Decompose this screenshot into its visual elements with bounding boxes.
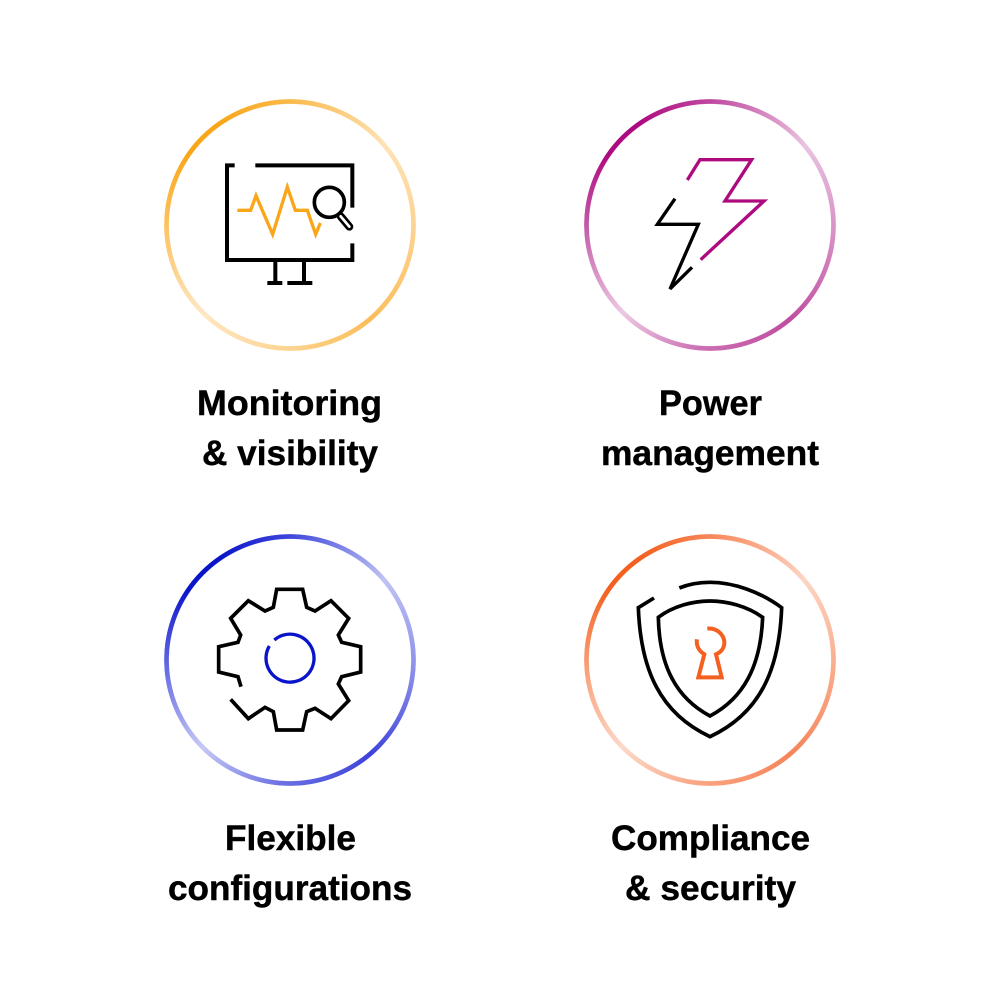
icon: gear <box>216 588 362 732</box>
heading <box>168 819 412 908</box>
outer shield <box>638 582 782 737</box>
icon: lightning bolt <box>654 158 768 290</box>
heading: Flexible <box>225 819 356 858</box>
ring: orange-red gradient circle <box>584 534 836 786</box>
ring: orange gradient circle <box>164 99 416 351</box>
ring: blue gradient circle <box>164 534 416 786</box>
heading: & visibility <box>202 434 379 473</box>
bolt upper part <box>687 160 764 260</box>
icon: monitor with chart and magnifier <box>225 163 354 285</box>
pulse line <box>237 187 320 234</box>
heading: Power <box>659 384 762 423</box>
ring: magenta gradient circle <box>584 99 836 351</box>
heading <box>197 384 382 473</box>
keyhole <box>697 629 724 677</box>
magnifier <box>314 187 349 227</box>
heading: management <box>601 434 819 473</box>
panel: power management <box>584 99 836 473</box>
heading: & security <box>625 869 797 908</box>
panel: compliance and security <box>584 534 836 908</box>
heading <box>611 819 810 908</box>
icon: shield with keyhole <box>636 580 784 739</box>
heading: configurations <box>168 869 412 908</box>
gear outline <box>219 589 361 730</box>
inner shield <box>658 601 763 716</box>
heading: Monitoring <box>197 384 382 423</box>
monitor frame <box>227 165 352 283</box>
heading: Compliance <box>611 819 810 858</box>
heading <box>601 384 819 473</box>
panel: flexible configurations <box>164 534 416 908</box>
gear centre <box>266 634 314 682</box>
bolt lower part <box>657 199 698 289</box>
panel: monitoring and visibility <box>164 99 416 473</box>
